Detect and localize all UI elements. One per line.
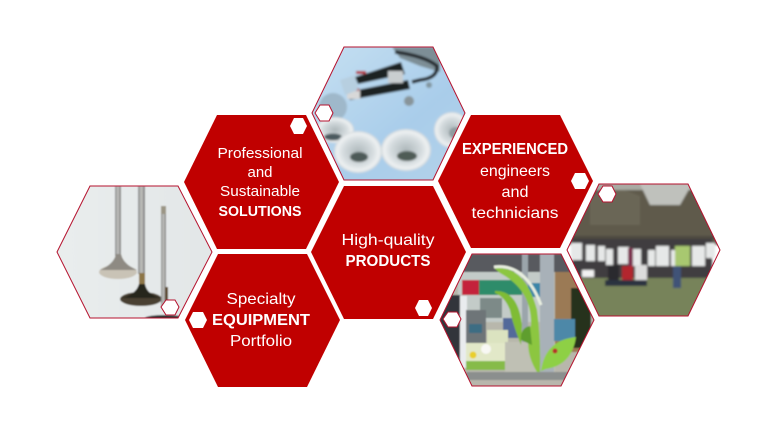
solutions text: SOLUTIONS [218,204,302,220]
hexagon: EXPERIENCED engineers and technicians [438,115,593,248]
solutions text: Professional [218,146,302,162]
experienced text: EXPERIENCED [462,141,568,158]
small white hexagon markers on red [189,118,589,328]
experienced text: technicians [472,205,558,222]
experienced text: engineers [480,163,550,180]
products text [342,232,434,270]
solutions text: and [248,165,272,181]
experienced text [462,141,568,222]
photo hexagon: machined parts [310,45,470,182]
photo hexagon: engine valves [55,184,215,321]
products text: High-quality [342,232,434,249]
hexagon: High-quality PRODUCTS [311,186,466,319]
equipment text: EQUIPMENT [212,312,310,329]
solutions text: Sustainable [220,184,300,200]
equipment text: Portfolio [230,333,292,350]
hexagon: Professional and Sustainable SOLUTIONS [184,115,339,249]
photo hexagon: fuel station [438,252,596,388]
solutions text [218,146,302,220]
equipment text: Specialty [226,291,296,308]
hexagon: Specialty EQUIPMENT Portfolio [185,254,340,387]
equipment text [212,291,310,350]
small outlined hexagon markers on photos [161,105,616,327]
experienced text: and [502,184,528,201]
photo hexagon: team group [565,182,723,320]
products text: PRODUCTS [346,253,431,270]
